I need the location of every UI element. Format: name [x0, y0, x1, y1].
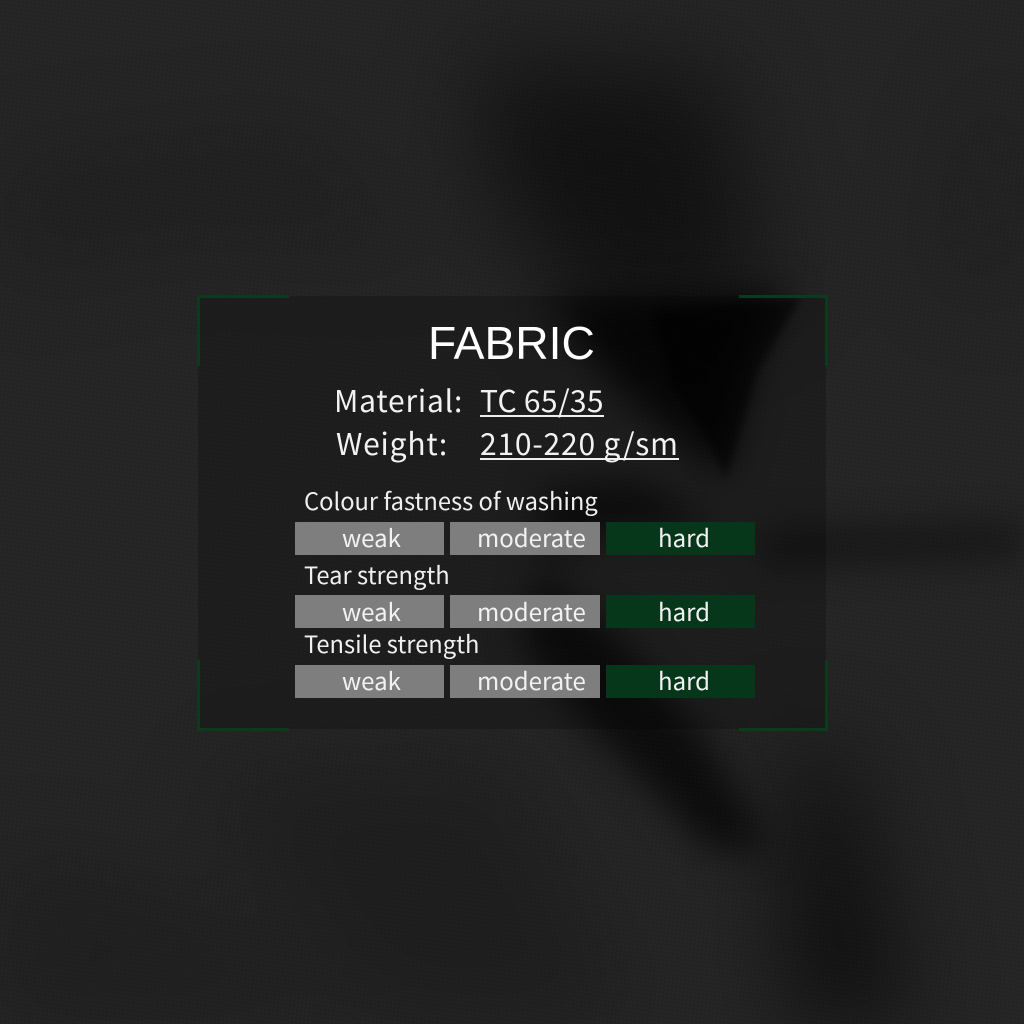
- text: weight label: Weight:: [336, 420, 448, 464]
- rating row: tear strength: moderate: [477, 593, 586, 628]
- title: FABRIC: [428, 317, 595, 369]
- text: material label: Material:: [334, 377, 463, 421]
- rating row: tear strength: [295, 593, 755, 628]
- panel: translucent dark card: [198, 296, 826, 729]
- text: weight value: 210-220 g/sm: [480, 420, 679, 464]
- rating row: colour fastness: moderate: [477, 519, 586, 554]
- corner bracket: top right: [739, 295, 828, 366]
- rating row: colour fastness: [295, 519, 755, 555]
- heading: tensile strength: Tensile strength: [304, 626, 479, 660]
- rating row: tear strength: hard: [658, 593, 710, 628]
- corner bracket: top left: [197, 295, 289, 366]
- heading: tear strength: Tear strength: [304, 557, 450, 591]
- rating row: colour fastness: hard: [658, 519, 710, 554]
- heading: colour fastness of washing: Colour fastness of washing: [304, 483, 598, 517]
- rating row: colour fastness: weak: [342, 519, 401, 554]
- rating row: tear strength: weak: [342, 593, 401, 628]
- rating row: tensile strength: weak: [342, 662, 401, 697]
- corner bracket: bottom left: [197, 660, 289, 731]
- rating row: tensile strength: moderate: [477, 662, 586, 697]
- text: material value: TC 65/35: [480, 377, 604, 421]
- rating row: tensile strength: hard: [658, 662, 710, 697]
- rating row: tensile strength: [295, 662, 755, 698]
- corner bracket: bottom right: [739, 660, 828, 731]
